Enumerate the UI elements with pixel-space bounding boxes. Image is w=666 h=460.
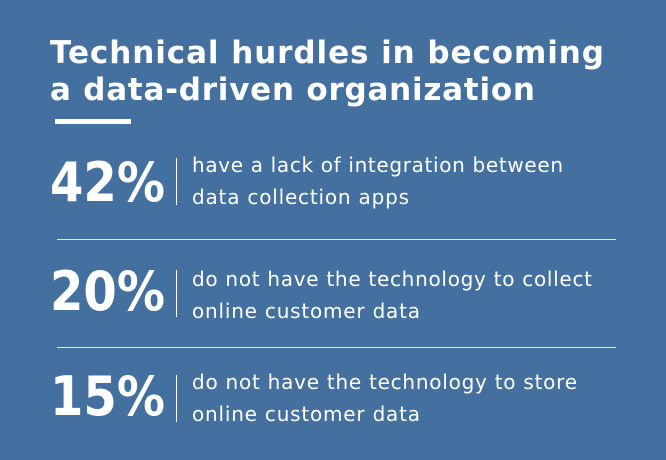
title: a data-driven organization bbox=[50, 72, 535, 108]
stat: 20%: do not have the technology to collect bbox=[192, 267, 592, 291]
stat: 42%: 42% bbox=[50, 151, 165, 214]
stat: 42% bbox=[50, 151, 563, 214]
stat: 42%: have a lack of integration between bbox=[192, 153, 563, 177]
stat: 15%: 15% bbox=[50, 365, 165, 428]
stat: 15% bbox=[50, 365, 577, 428]
stat: 20%: online customer data bbox=[192, 299, 420, 323]
title: Technical hurdles in becoming bbox=[50, 35, 604, 71]
title underline bbox=[55, 119, 131, 124]
stat: 20% bbox=[50, 260, 592, 323]
title bbox=[50, 35, 604, 108]
stat: 15%: do not have the technology to store bbox=[192, 370, 577, 394]
stat: 20%: 20% bbox=[50, 260, 165, 323]
stat: 42%: data collection apps bbox=[192, 185, 409, 209]
stat: 15%: online customer data bbox=[192, 402, 420, 426]
